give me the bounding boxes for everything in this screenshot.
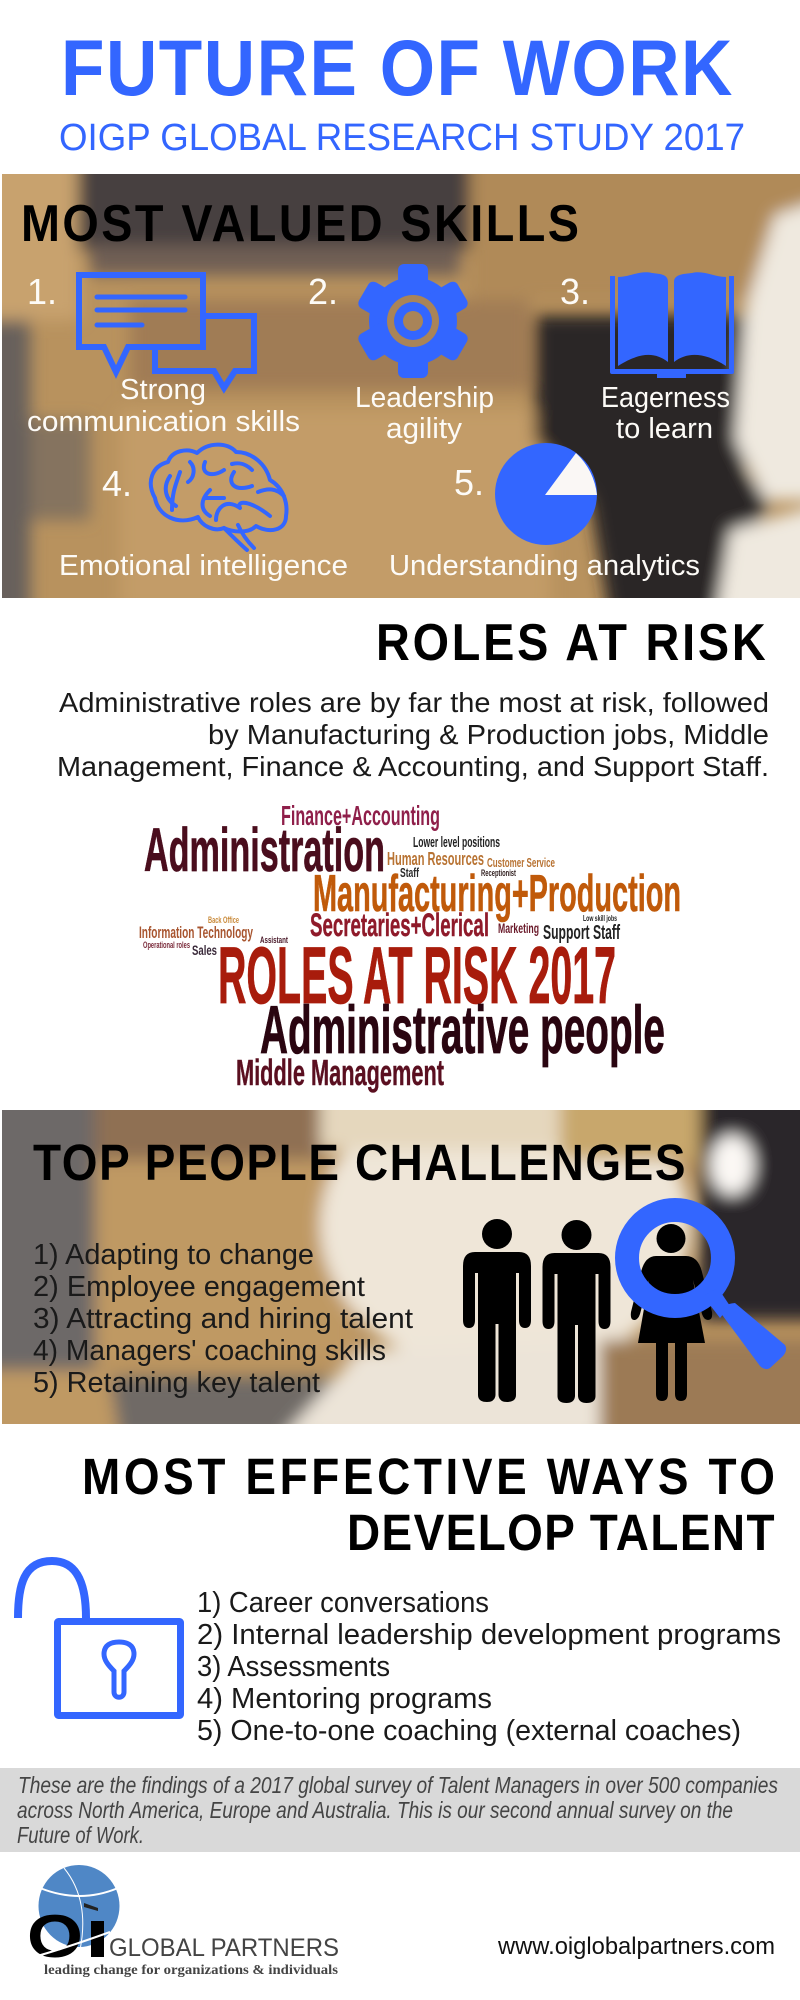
logo wordmark: GLOBAL PARTNERS: [109, 1934, 339, 1962]
heading: most valued skills: MOST VALUED SKILLS: [21, 195, 579, 253]
chart: word cloud: Information Technology: [139, 923, 253, 942]
number 4: 4.: [102, 463, 132, 504]
chart: word cloud: Staff: [400, 865, 419, 880]
paragraph: Administrative roles are by far the most at risk, followed: [59, 687, 769, 718]
skill 4: [59, 445, 348, 582]
heading: top people challenges: TOP PEOPLE CHALLENGES: [33, 1135, 686, 1192]
icon: magnifying glass: [627, 1210, 786, 1369]
chart: word cloud: Administration: [144, 816, 385, 884]
icon: pie chart: [495, 443, 597, 545]
number 2: 2.: [308, 271, 338, 312]
label: [27, 374, 300, 438]
chart: word cloud: Marketing: [498, 920, 539, 936]
chart: word cloud: Support Staff: [543, 922, 620, 944]
icon: open book: [610, 272, 734, 378]
chart: word cloud: Low skill jobs: [583, 914, 617, 923]
skill 5: [389, 443, 700, 582]
chart: word cloud: Secretaries+Clerical: [310, 907, 489, 943]
label: Eagerness: [601, 382, 730, 414]
panel background: blurred photo: [2, 1110, 800, 1424]
icon: person 2: [542, 1220, 610, 1403]
logo globe: [38, 1865, 120, 1950]
challenges list: 1) Adapting to change: [33, 1239, 314, 1271]
chart: word cloud: Sales: [192, 942, 217, 958]
panel: top people challenges: [2, 1110, 800, 1424]
chart: word cloud: Lower level positions: [413, 834, 500, 851]
number 1: 1.: [27, 271, 57, 312]
label: Strong: [120, 374, 206, 406]
panel background: blurred photo: [2, 174, 800, 598]
chart: word cloud: Human Resources: [387, 849, 484, 869]
icon: person 1: [463, 1219, 531, 1402]
talent development list: [197, 1587, 781, 1747]
paragraph: Management, Finance & Accounting, and Support Staff.: [57, 751, 769, 782]
paragraph: [57, 687, 769, 782]
logo letters OI: O: [27, 1903, 83, 1970]
title: FUTURE OF WORK: [61, 24, 732, 112]
icon: person 3 (woman): [631, 1224, 712, 1401]
chart: word cloud: Assistant: [260, 935, 288, 945]
panel: roles at risk: [57, 614, 769, 1093]
skill 1: [27, 271, 300, 438]
number 3: 3.: [560, 271, 590, 312]
panel: most effective ways to develop talent: [18, 1449, 781, 1747]
heading: roles at risk: ROLES AT RISK: [376, 614, 766, 672]
label: Emotional intelligence: [59, 550, 348, 582]
logo letters OI: [27, 1903, 110, 1970]
logo: OI Global Partners: [27, 1865, 339, 1978]
panel: survey note: [0, 1768, 800, 1852]
label: [601, 382, 730, 445]
talent development list: 3) Assessments: [197, 1651, 390, 1683]
skill 3: [560, 271, 734, 445]
challenges list: 5) Retaining key talent: [33, 1367, 320, 1399]
label: communication skills: [27, 406, 300, 438]
note text: Future of Work.: [17, 1822, 144, 1848]
talent development list: 1) Career conversations: [197, 1587, 489, 1619]
heading: develop talent: MOST EFFECTIVE WAYS TO: [82, 1449, 775, 1506]
challenges list: 3) Attracting and hiring talent: [33, 1303, 413, 1335]
note background: [0, 1768, 800, 1852]
chart: word cloud: Middle Management: [236, 1052, 444, 1093]
label: agility: [386, 413, 462, 445]
skill 2: [308, 264, 494, 445]
note text: [17, 1772, 778, 1848]
challenges list: [33, 1239, 413, 1399]
number 5: 5.: [454, 462, 484, 503]
icon: open padlock: [18, 1561, 180, 1716]
talent development list: 2) Internal leadership development programs: [197, 1619, 781, 1651]
talent development list: 5) One-to-one coaching (external coaches): [197, 1715, 741, 1747]
chart: word cloud: Back Office: [208, 915, 239, 925]
challenges list: 4) Managers' coaching skills: [33, 1335, 386, 1367]
label: [355, 382, 494, 445]
icon: brain: [151, 445, 286, 550]
chart: word cloud: Customer Service: [487, 855, 555, 870]
challenges list: 2) Employee engagement: [33, 1271, 365, 1303]
label: to learn: [616, 413, 713, 445]
paragraph: by Manufacturing & Production jobs, Middle: [208, 719, 769, 750]
panel: most valued skills: [2, 174, 800, 598]
website url: www.oiglobalpartners.com: [497, 1933, 775, 1960]
subtitle: OIGP GLOBAL RESEARCH STUDY 2017: [59, 117, 745, 159]
heading: develop talent: DEVELOP TALENT: [347, 1505, 775, 1562]
chart: word cloud: Receptionist: [481, 868, 516, 878]
heading: develop talent: [82, 1449, 775, 1562]
logo tagline: leading change for organizations & individuals: [44, 1963, 339, 1978]
label: Leadership: [355, 382, 494, 414]
chart: word cloud: Operational roles: [143, 940, 190, 950]
icon: gear: [356, 264, 470, 378]
icon: speech bubbles: [79, 275, 254, 388]
label: Understanding analytics: [389, 550, 700, 582]
chart: word cloud: [139, 800, 681, 1093]
talent development list: 4) Mentoring programs: [197, 1683, 492, 1715]
chart: word cloud: Finance+Accounting: [281, 800, 440, 831]
